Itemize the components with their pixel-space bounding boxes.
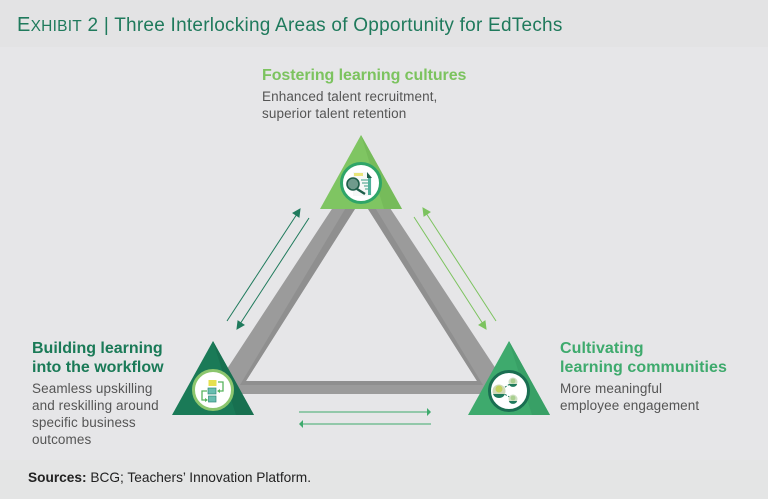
title: EXHIBIT 2 | Three Interlocking Areas of Opportunity for EdTechs xyxy=(17,14,563,36)
text: building description: specific business xyxy=(32,415,136,430)
arrows: left pair xyxy=(227,209,309,329)
text: building description xyxy=(32,381,159,447)
text: cultivating description: More meaningful xyxy=(560,381,662,396)
text: fostering description: Enhanced talent recruitment, xyxy=(262,89,437,104)
heading: cultivating communities: learning communities xyxy=(560,359,727,376)
arrows: bottom pair xyxy=(299,408,431,428)
text: cultivating description: employee engagement xyxy=(560,398,699,413)
arrows: right pair xyxy=(414,208,496,329)
icon: top triangle, learning cultures xyxy=(320,135,402,209)
heading: cultivating communities xyxy=(560,340,727,376)
icon: left triangle, workflow xyxy=(172,341,254,415)
icon: right triangle, communities xyxy=(468,341,550,415)
heading: fostering learning cultures: Fostering learning cultures xyxy=(262,67,466,84)
text: fostering description: superior talent retention xyxy=(262,106,406,121)
heading: building learning: Building learning xyxy=(32,340,163,357)
text: cultivating description xyxy=(560,381,699,413)
sources note: Sources: BCG; Teachers’ Innovation Platform. xyxy=(28,470,311,485)
text: building description: Seamless upskilling xyxy=(32,381,152,396)
text: building description: outcomes xyxy=(32,432,91,447)
heading: building learning xyxy=(32,340,164,376)
text: building description: and reskilling around xyxy=(32,398,159,413)
heading: cultivating communities: Cultivating xyxy=(560,340,644,357)
text: fostering description xyxy=(262,89,437,121)
heading: building learning: into the workflow xyxy=(32,359,164,376)
interlocking triangle frame xyxy=(225,205,498,394)
